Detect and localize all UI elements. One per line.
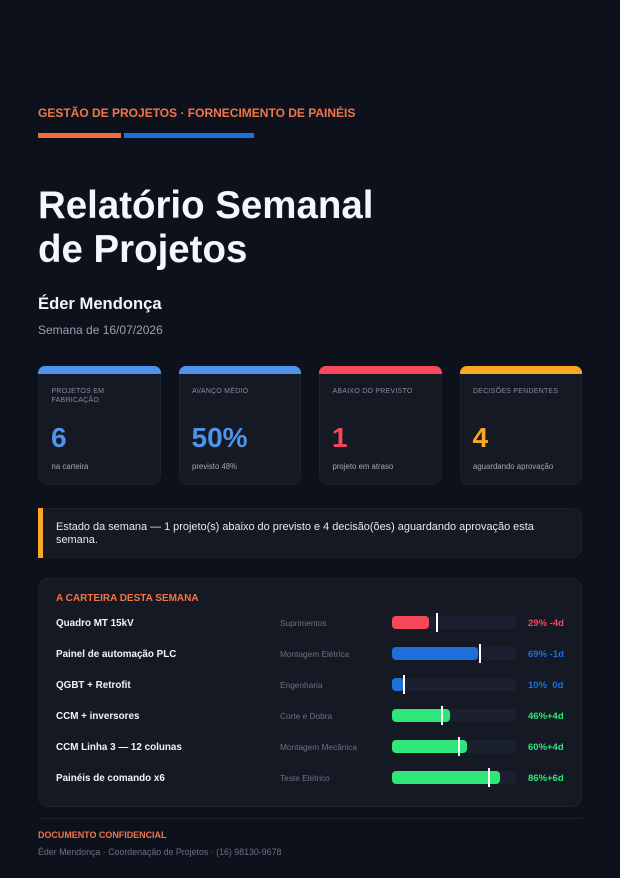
panel: KPI avanço médio bbox=[178, 366, 301, 485]
row: CCM Linha 3: Montagem Mecânica bbox=[280, 742, 357, 752]
row: CCM + inversores bbox=[56, 706, 564, 725]
row: CCM + inversores: CCM + inversores bbox=[56, 711, 139, 722]
title: de Projetos bbox=[38, 228, 247, 271]
row: QGBT + Retrofit: Engenharia bbox=[280, 680, 322, 690]
callout: estado da semana bbox=[38, 508, 582, 558]
row: CCM + inversores: 46%+4d bbox=[528, 711, 564, 722]
eyebrow heading: GESTÃO DE PROJETOS · FORNECIMENTO DE PAINÉIS bbox=[38, 106, 355, 120]
panel: KPI projetos em fabricação: PROJETOS EM bbox=[52, 388, 104, 395]
panel heading: A CARTEIRA DESTA SEMANA bbox=[56, 593, 199, 604]
panel: KPI abaixo do previsto: 1 bbox=[332, 422, 348, 453]
row: QGBT + Retrofit bbox=[56, 675, 563, 694]
panel: KPI projetos em fabricação: 6 bbox=[51, 422, 67, 453]
footer contact: Éder Mendonça · Coordenação de Projetos · (16) 98130-9678 bbox=[38, 847, 281, 857]
panel: KPI avanço médio: AVANÇO MÉDIO bbox=[192, 388, 248, 395]
row: CCM Linha 3 bbox=[56, 737, 564, 756]
footer label: DOCUMENTO CONFIDENCIAL bbox=[38, 830, 166, 840]
panel: KPI abaixo do previsto: ABAIXO DO PREVISTO bbox=[332, 388, 413, 395]
panel: KPI projetos em fabricação: FABRICAÇÃO bbox=[52, 397, 99, 404]
row: QGBT + Retrofit: QGBT + Retrofit bbox=[56, 680, 131, 691]
row: Painéis de comando x6 bbox=[56, 768, 564, 787]
panel: KPI decisões pendentes: 4 bbox=[472, 422, 488, 453]
row: Quadro MT 15kV: Suprimentos bbox=[280, 618, 327, 628]
row: Painéis de comando x6: Painéis de comando x6 bbox=[56, 773, 165, 784]
title bbox=[38, 184, 373, 271]
row: Quadro MT 15kV bbox=[56, 613, 564, 632]
panel: a carteira desta semana bbox=[38, 578, 582, 807]
panel: KPI abaixo do previsto bbox=[319, 366, 442, 485]
panel: KPI avanço médio: 50% bbox=[192, 422, 248, 453]
author: Éder Mendonça bbox=[38, 294, 162, 313]
row: Quadro MT 15kV: 29% -4d bbox=[528, 618, 564, 629]
week date: Semana de 16/07/2026 bbox=[38, 323, 163, 337]
row: Painel de automação PLC: Montagem Elétrica bbox=[280, 649, 349, 659]
accent rule bbox=[38, 133, 254, 138]
row: Painel de automação PLC bbox=[56, 644, 564, 663]
row: CCM Linha 3: CCM Linha 3 — 12 colunas bbox=[56, 742, 182, 753]
panel: KPI decisões pendentes: DECISÕES PENDENTES bbox=[473, 388, 558, 395]
row: Painéis de comando x6: 86%+6d bbox=[528, 773, 564, 784]
panel: KPI abaixo do previsto: projeto em atraso bbox=[332, 462, 393, 471]
panel: KPI projetos em fabricação: na carteira bbox=[52, 462, 88, 471]
row: CCM + inversores: Corte e Dobra bbox=[280, 711, 332, 721]
row: QGBT + Retrofit: 10% 0d bbox=[528, 680, 563, 691]
panel: KPI decisões pendentes bbox=[460, 366, 582, 485]
panel: KPI decisões pendentes: aguardando aprovação bbox=[473, 462, 553, 471]
row: Painéis de comando x6: Teste Elétrico bbox=[280, 773, 330, 783]
row: Quadro MT 15kV: Quadro MT 15kV bbox=[56, 618, 134, 629]
row: Painel de automação PLC: 69% -1d bbox=[528, 649, 564, 660]
panel: KPI projetos em fabricação bbox=[38, 366, 160, 485]
title: Relatório Semanal bbox=[38, 184, 373, 227]
row: CCM Linha 3: 60%+4d bbox=[528, 742, 564, 753]
callout: estado da semana: Estado da semana — 1 projeto(s) abaixo do previsto e 4 decisão(ões) aguardando aprovação esta semana. bbox=[56, 521, 534, 546]
row: Painel de automação PLC: Painel de automação PLC bbox=[56, 649, 176, 660]
panel: KPI avanço médio: previsto 48% bbox=[192, 462, 237, 471]
